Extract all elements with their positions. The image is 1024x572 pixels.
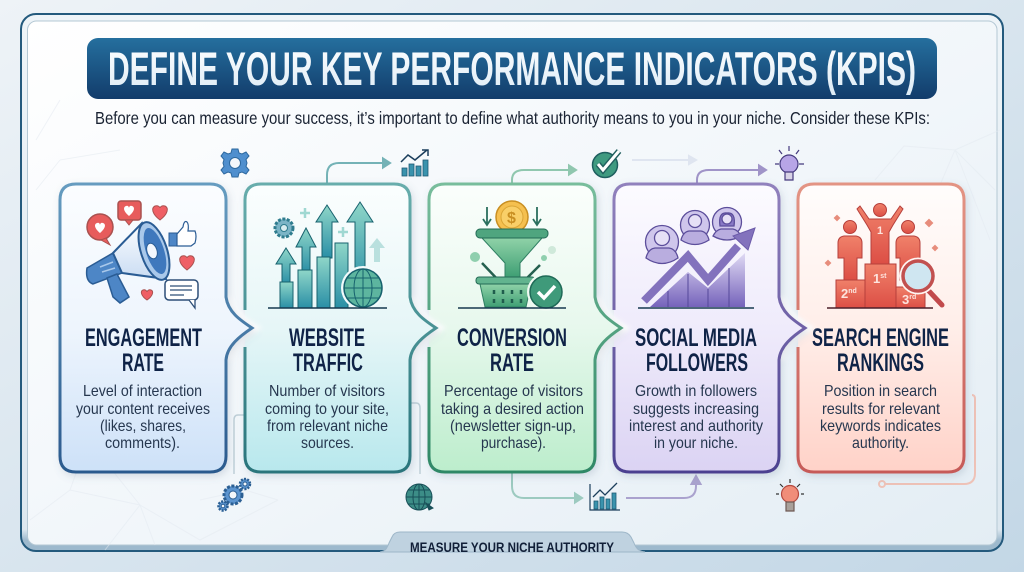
gray connector right	[410, 403, 420, 474]
panel: conversion rate	[429, 184, 621, 472]
icon: podium and magnifier: 1	[873, 271, 880, 286]
icon: lightbulb red	[776, 479, 804, 511]
icon: podium and magnifier	[826, 204, 942, 308]
description: engagement rate: comments).	[105, 435, 180, 452]
heading: conversion rate: CONVERSION	[457, 324, 567, 352]
icon: conversion funnel and basket	[458, 201, 566, 311]
icon: small chart top	[401, 150, 428, 176]
description: engagement rate: Level of interaction	[83, 383, 202, 400]
icon: lightbulb purple	[775, 146, 804, 180]
description: social media followers: in your niche.	[654, 435, 738, 452]
heading: engagement rate: RATE	[122, 349, 164, 377]
description: search engine rankings: results for relevant	[822, 401, 940, 418]
heading: search engine rankings: RANKINGS	[837, 349, 924, 377]
description: social media followers: suggests increasing	[633, 401, 759, 418]
icon: megaphone with reactions	[87, 201, 198, 308]
description: search engine rankings: authority.	[852, 435, 909, 452]
icon: check badge top	[592, 151, 619, 178]
heading: social media followers	[635, 324, 757, 377]
heading: conversion rate: RATE	[490, 349, 534, 377]
icon: podium and magnifier: rd	[909, 294, 916, 301]
heading: website traffic	[289, 324, 365, 377]
heading: conversion rate	[457, 324, 567, 377]
panel: social media followers	[614, 184, 805, 472]
panel: search engine rankings	[798, 184, 964, 472]
arrow: conversion connector	[512, 166, 576, 184]
footer tab	[380, 532, 645, 555]
heading: website traffic: TRAFFIC	[293, 349, 363, 377]
heading: social media followers: SOCIAL MEDIA	[635, 324, 757, 352]
card shape: website traffic	[245, 184, 436, 472]
description: engagement rate	[76, 383, 210, 452]
arrow: social connector	[697, 166, 766, 184]
heading: engagement rate	[85, 324, 202, 377]
icon: gears bottom	[218, 479, 250, 510]
icon: followers growth	[638, 208, 755, 308]
description: conversion rate: (newsletter sign-up,	[450, 418, 576, 435]
card shape: search engine rankings	[798, 184, 964, 472]
description: website traffic: Number of visitors	[269, 383, 385, 400]
icon: globe bottom	[406, 484, 433, 510]
description: engagement rate: your content receives	[76, 401, 210, 418]
heading: search engine rankings	[812, 324, 949, 377]
arrow: bottom conversion connector	[512, 473, 582, 502]
description: website traffic: sources.	[301, 435, 354, 452]
icon: gear top	[221, 149, 249, 177]
icon: podium and magnifier: 2	[841, 286, 848, 301]
card shape: engagement	[60, 184, 252, 472]
description: search engine rankings: Position in search	[824, 383, 937, 400]
arrow: faint connector	[632, 156, 696, 164]
card shape: conversion rate	[429, 184, 621, 472]
icon: podium and magnifier: nd	[848, 288, 857, 295]
description: social media followers: Growth in followers	[635, 383, 757, 400]
description: website traffic: coming to your site,	[265, 401, 389, 418]
icon: traffic bars and arrows	[268, 202, 387, 310]
description: search engine rankings	[820, 383, 941, 452]
arrow: website traffic connector	[327, 158, 390, 184]
description: social media followers: interest and authority	[629, 418, 763, 435]
arrow: bottom social connector	[626, 476, 700, 498]
heading: social media followers: FOLLOWERS	[646, 349, 748, 377]
heading: search engine rankings: SEARCH ENGINE	[812, 324, 949, 352]
card shape: social media followers	[614, 184, 805, 472]
footer tab: MEASURE YOUR NICHE AUTHORITY	[410, 540, 614, 555]
description: search engine rankings: keywords indicates	[820, 418, 941, 435]
icon: podium and magnifier: 1	[877, 225, 883, 237]
panel: website traffic	[245, 184, 436, 472]
icon: small chart bottom	[590, 483, 620, 510]
description: social media followers	[629, 383, 763, 452]
panel: engagement rate	[60, 184, 252, 472]
icon: podium and magnifier: 3	[902, 292, 909, 307]
description: engagement rate: (likes, shares,	[100, 418, 186, 435]
description: website traffic	[265, 383, 389, 452]
heading: website traffic: WEBSITE	[289, 324, 365, 352]
connector: search engine side	[879, 395, 975, 487]
description: conversion rate: purchase).	[481, 435, 546, 452]
gray connector left	[234, 415, 245, 474]
description: conversion rate	[441, 383, 584, 452]
heading: engagement rate: ENGAGEMENT	[85, 324, 202, 352]
icon: podium and magnifier: st	[880, 273, 887, 280]
icon: conversion funnel and basket: $	[507, 210, 516, 227]
description: website traffic: from relevant niche	[267, 418, 388, 435]
description: conversion rate: taking a desired action	[441, 401, 584, 418]
description: conversion rate: Percentage of visitors	[444, 383, 583, 400]
background network pattern	[30, 100, 1000, 550]
